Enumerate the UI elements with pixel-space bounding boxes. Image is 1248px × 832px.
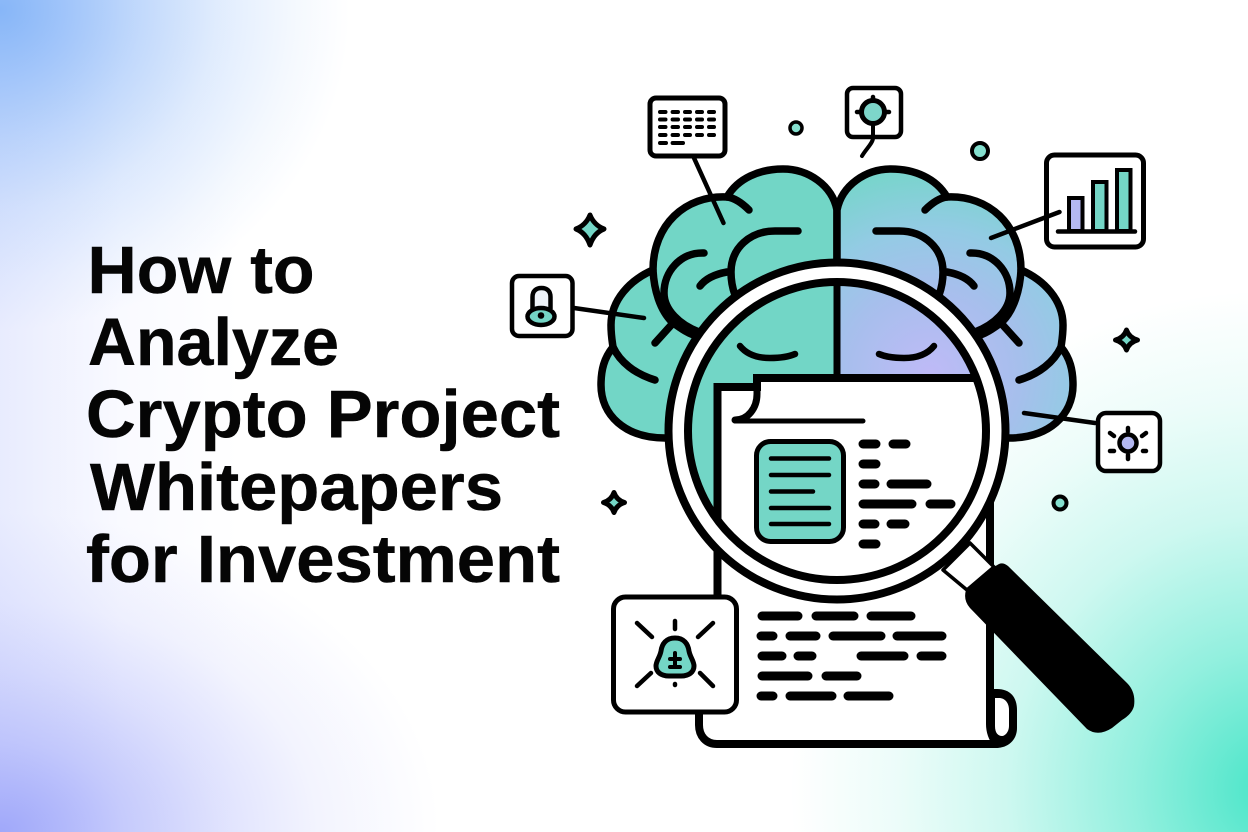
document text lines	[761, 616, 942, 696]
title	[86, 233, 560, 597]
right hemisphere	[837, 169, 1073, 438]
magnifying glass	[668, 262, 1134, 733]
icon: sun settings callout	[1024, 413, 1160, 471]
lens contents	[692, 286, 974, 518]
title: How to	[88, 233, 314, 308]
inner ring	[688, 282, 986, 580]
icon: target callout	[847, 88, 901, 156]
left hemisphere	[601, 169, 837, 438]
infographic canvas	[86, 86, 1162, 748]
title: Crypto Project	[86, 377, 560, 452]
document page fold	[735, 384, 863, 421]
title: Analyze	[88, 305, 339, 380]
icon: alert bell callout	[614, 597, 736, 712]
icon: data table callout	[650, 98, 725, 223]
brain	[601, 169, 1073, 438]
decorative dots	[790, 122, 1066, 510]
handle	[965, 563, 1134, 733]
magnified text lines	[863, 444, 951, 544]
outer ring	[668, 262, 1006, 600]
sparkles	[576, 215, 1138, 512]
neck	[943, 543, 994, 590]
icon: bar chart callout	[991, 155, 1144, 247]
title: for Investment	[86, 522, 560, 597]
icon: padlock callout	[512, 276, 644, 336]
whitepaper document	[699, 378, 1017, 748]
highlighted text card	[756, 442, 844, 542]
title: Whitepapers	[90, 450, 503, 525]
